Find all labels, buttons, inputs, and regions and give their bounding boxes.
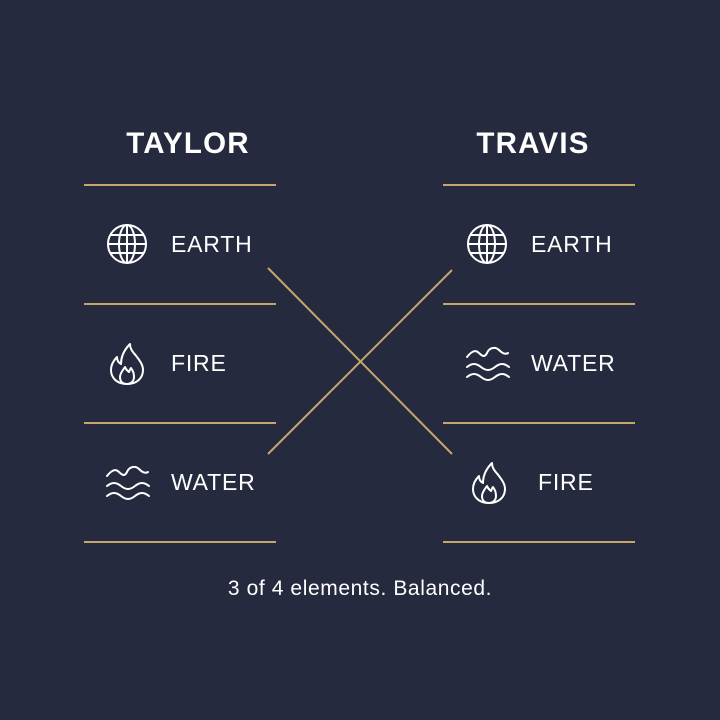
label: EARTH right: EARTH — [531, 231, 613, 257]
icon: fire left — [110, 343, 144, 385]
heading: TRAVIS: TRAVIS — [476, 127, 590, 160]
label: WATER right: WATER — [531, 350, 616, 376]
icon: water left — [106, 466, 150, 500]
icon: globe left — [107, 224, 147, 264]
heading: TAYLOR: TAYLOR — [126, 127, 250, 160]
footer caption: 3 of 4 elements. Balanced. — [228, 577, 492, 600]
icon: fire right — [472, 462, 506, 504]
label: FIRE left: FIRE — [171, 350, 227, 376]
icon: globe right — [467, 224, 507, 264]
label: WATER left: WATER — [171, 469, 256, 495]
label: EARTH left: EARTH — [171, 231, 253, 257]
label: FIRE right: FIRE — [538, 469, 594, 495]
icon: water right — [466, 346, 510, 381]
